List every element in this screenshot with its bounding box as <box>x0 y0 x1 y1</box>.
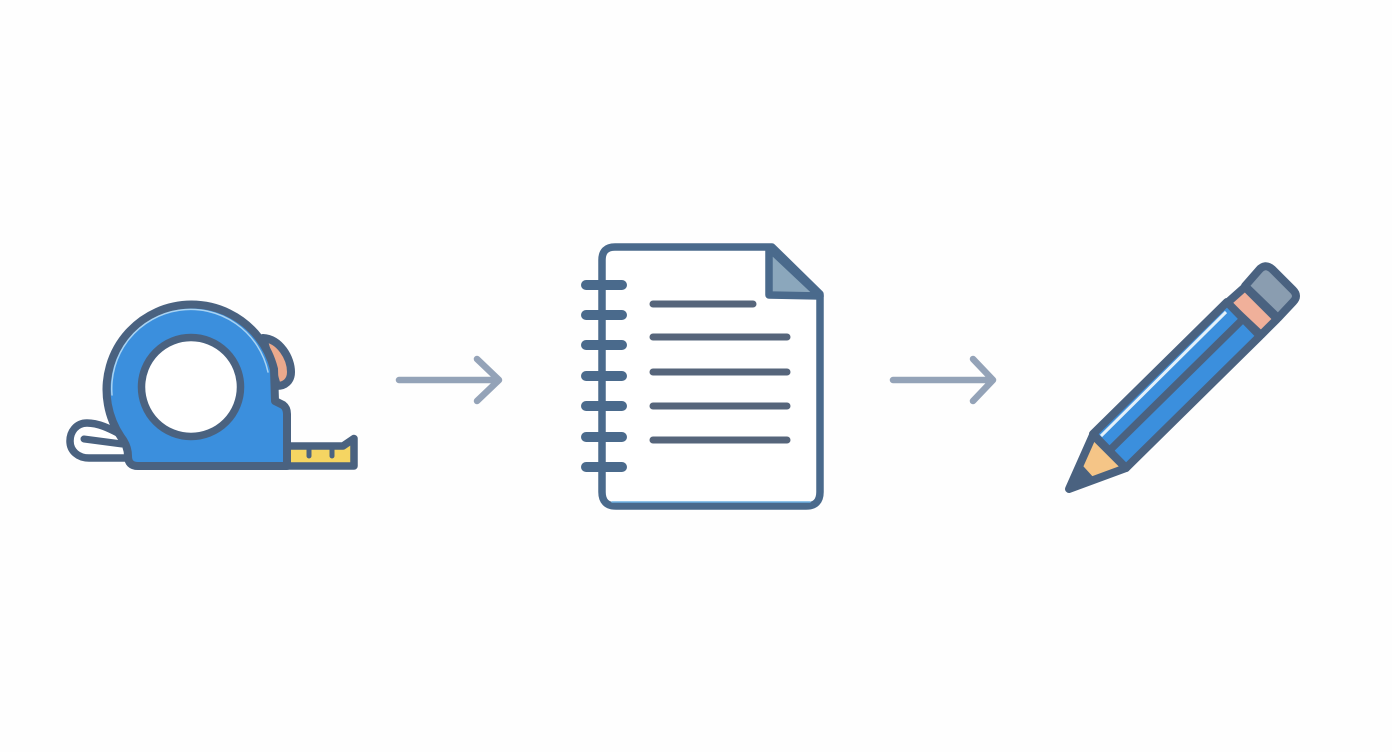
tape measure clip inner line <box>84 439 122 444</box>
pencil lead <box>1069 467 1092 489</box>
pencil eraser <box>1245 266 1296 318</box>
notebook page <box>602 247 820 506</box>
icon: tape measure <box>70 305 354 466</box>
arrow: notebook to pencil <box>893 359 993 401</box>
tape measure body <box>107 305 287 466</box>
notebook page fold <box>769 248 820 296</box>
tape measure thumb lock <box>263 338 291 386</box>
pencil body <box>1093 302 1260 468</box>
icon: spiral notebook <box>586 247 820 506</box>
tape measure centre hole <box>142 338 240 436</box>
arrow: tape measure to notebook <box>399 359 499 401</box>
pencil ferrule <box>1227 287 1277 335</box>
notebook bottom highlight <box>612 501 810 503</box>
notebook text lines <box>653 304 787 440</box>
pencil highlight <box>1101 312 1226 436</box>
pencil centre stripe <box>1109 319 1243 451</box>
tape measure belt clip <box>70 423 128 458</box>
pencil wood tip <box>1069 435 1126 489</box>
tape measure ticks <box>309 449 332 456</box>
tape measure blade <box>287 438 354 466</box>
icon: pencil <box>1069 266 1296 489</box>
tape measure rim highlight <box>112 309 268 395</box>
notebook spiral rings <box>586 285 622 467</box>
